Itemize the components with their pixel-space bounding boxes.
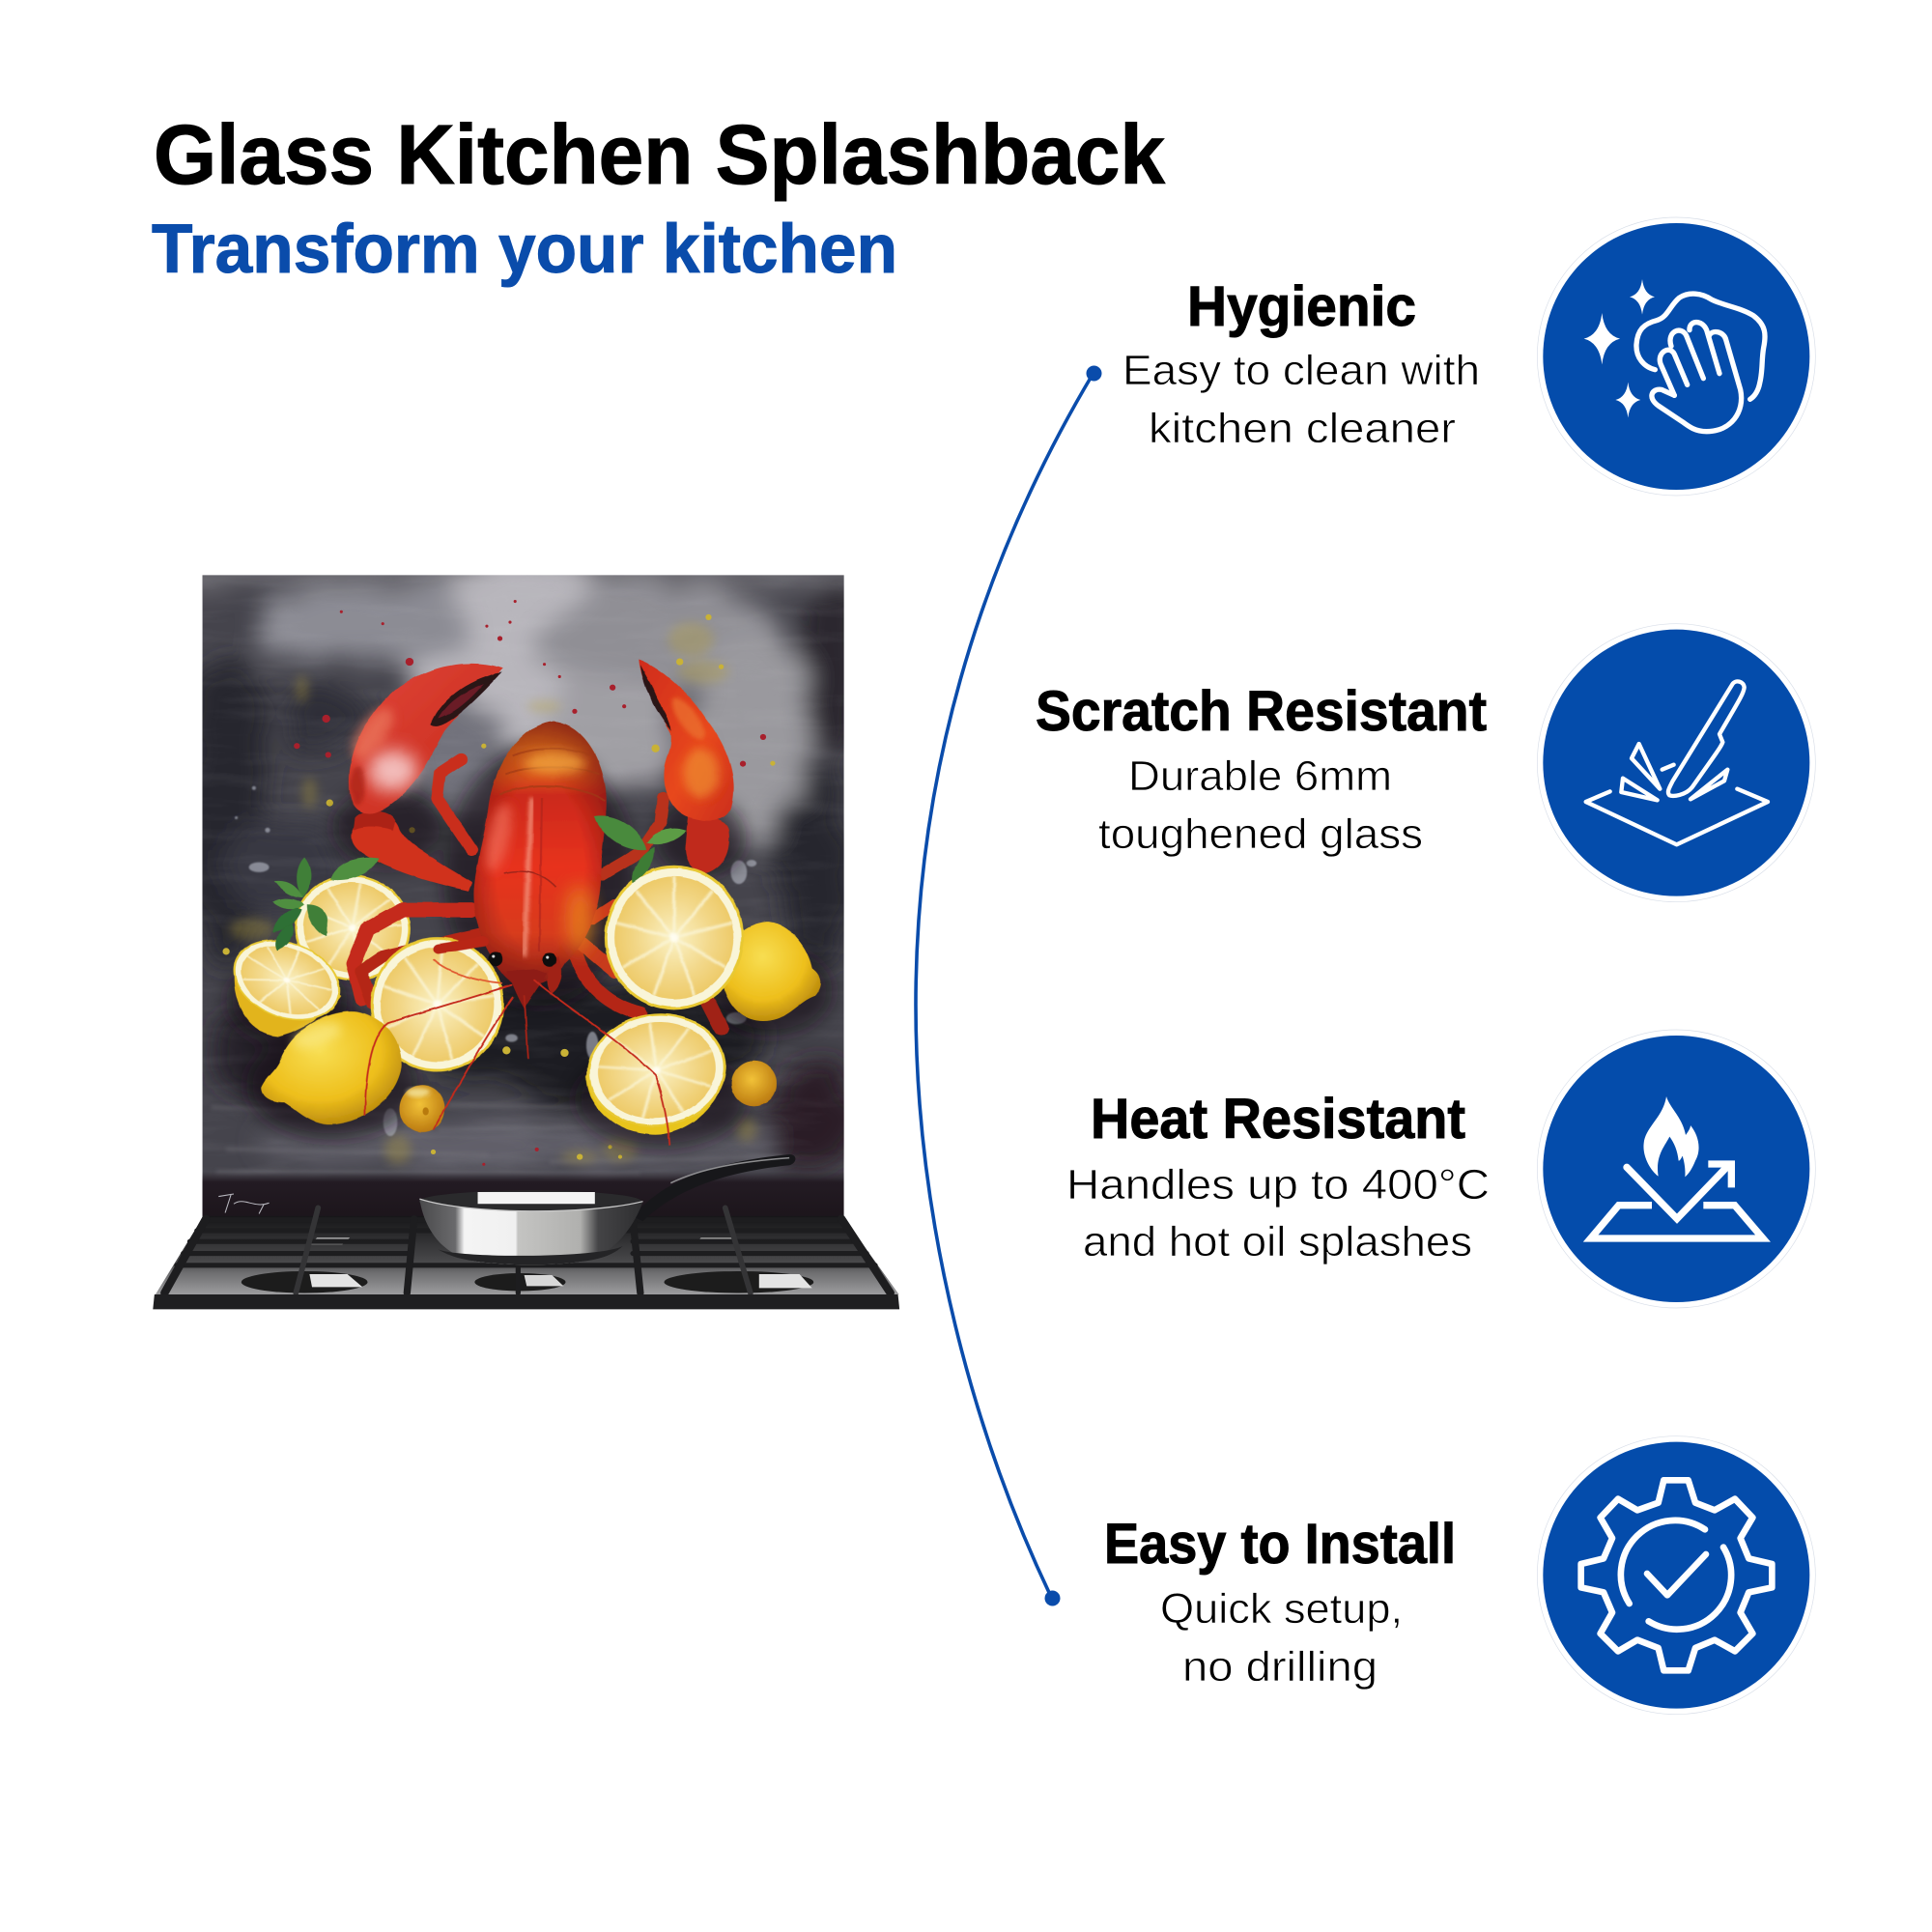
connector curve bbox=[916, 365, 1101, 1605]
lobster and lemons bbox=[221, 659, 820, 1145]
description: and hot oil splashes bbox=[1083, 1218, 1472, 1265]
small lemon right bbox=[731, 1061, 777, 1106]
lobster body bbox=[473, 722, 607, 1009]
product image: splashback above stove bbox=[153, 541, 899, 1309]
antennae bbox=[365, 960, 669, 1145]
icon: knife scratching glass bbox=[1537, 624, 1815, 902]
lemon slice centre bbox=[365, 931, 510, 1077]
paint splatter yellow haze bbox=[229, 622, 756, 1164]
white flecks bbox=[235, 786, 756, 1136]
bottom dark strip of painting bbox=[203, 1172, 844, 1219]
feature: Scratch Resistant bbox=[1036, 680, 1487, 858]
description: Durable 6mm bbox=[1128, 753, 1392, 800]
description: Easy to clean with bbox=[1122, 347, 1480, 394]
heading: Easy to Install bbox=[1104, 1513, 1456, 1576]
lower right half lemon bbox=[580, 1005, 733, 1136]
right claw bbox=[639, 659, 734, 873]
lemon slice behind left bbox=[286, 866, 419, 990]
paint specks yellow bbox=[222, 614, 776, 1160]
heading: Hygienic bbox=[1187, 275, 1416, 338]
whole lemon right bbox=[722, 922, 820, 1021]
heading: Scratch Resistant bbox=[1036, 680, 1487, 743]
dark shadow beneath lobster and lemons bbox=[226, 749, 833, 1150]
feature: Easy to Install bbox=[1104, 1513, 1456, 1690]
description: toughened glass bbox=[1098, 810, 1423, 858]
stove with grates and burners bbox=[153, 1208, 899, 1309]
brushed texture bbox=[203, 610, 844, 1174]
half lemon left bbox=[221, 924, 353, 1037]
burners bbox=[242, 1237, 813, 1293]
grates bbox=[164, 1208, 891, 1293]
lobster arms and legs bbox=[354, 759, 722, 1028]
basil left bbox=[272, 858, 379, 951]
icon: gear with check bbox=[1537, 1436, 1815, 1715]
icon: hand wiping bbox=[1537, 217, 1815, 496]
subtitle: Transform your kitchen bbox=[152, 212, 897, 288]
feature: Hygienic bbox=[1122, 275, 1480, 452]
lemon slice right bbox=[605, 866, 744, 1009]
paint streaks bbox=[211, 1105, 781, 1175]
description: Handles up to 400°C bbox=[1066, 1161, 1490, 1208]
lobster eyes bbox=[489, 952, 502, 966]
description: kitchen cleaner bbox=[1149, 405, 1456, 452]
pan bbox=[419, 1154, 795, 1264]
basil right bbox=[594, 816, 687, 883]
lobster lower left leg over lemon bbox=[439, 942, 484, 949]
small lemon bbox=[399, 1085, 445, 1132]
icon: flame on surface bbox=[1537, 1030, 1815, 1308]
whole lemon lower left bbox=[262, 1011, 402, 1124]
signature bbox=[218, 1194, 270, 1213]
feature: Heat Resistant bbox=[1066, 1088, 1490, 1265]
left big claw bbox=[345, 664, 503, 891]
paint splatter red bbox=[294, 600, 766, 1166]
painting background bbox=[203, 575, 844, 1217]
heading: Heat Resistant bbox=[1091, 1088, 1465, 1151]
description: Quick setup, bbox=[1160, 1585, 1403, 1633]
title: Glass Kitchen Splashback bbox=[154, 108, 1166, 202]
stove front edge bbox=[153, 1294, 899, 1309]
description: no drilling bbox=[1182, 1643, 1378, 1690]
